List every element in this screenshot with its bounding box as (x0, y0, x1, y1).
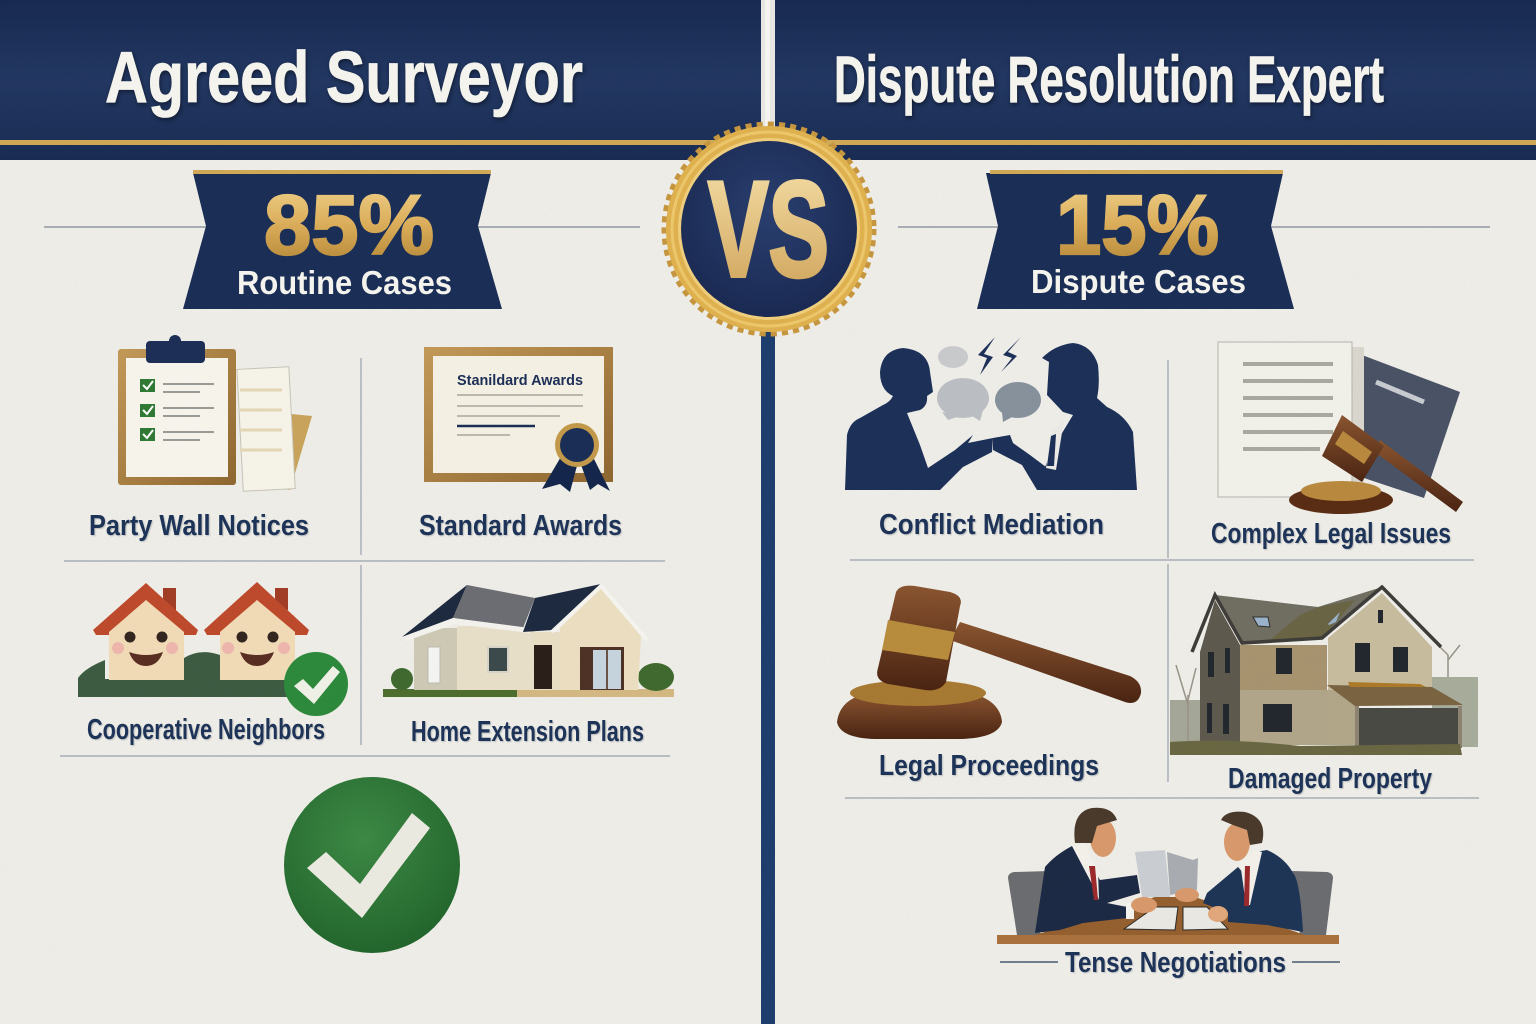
label: Dispute Cases: Dispute Cases (1031, 263, 1246, 300)
icon: damaged property (1170, 587, 1478, 755)
label: Routine Cases: Routine Cases (237, 264, 452, 301)
label: Complex Legal Issues: Complex Legal Issues (1211, 518, 1451, 550)
label: Party Wall Notices: Party Wall Notices (89, 510, 309, 542)
label: Tense Negotiations: Tense Negotiations (1065, 947, 1286, 979)
icon: clipboard with documents (118, 335, 312, 491)
stat: 85%: 85% (264, 178, 434, 272)
title: Agreed Surveyor: Agreed Surveyor (105, 38, 583, 118)
icon: certificate: Stanildard Awards (457, 372, 583, 389)
icon: large gavel (837, 586, 1141, 739)
label: Damaged Property: Damaged Property (1228, 763, 1432, 795)
panel: right stat ribbon (898, 170, 1490, 309)
badge: VS medal: VS (708, 153, 829, 305)
icon: large green check (284, 777, 460, 953)
icon: conflict mediation silhouettes (845, 337, 1137, 490)
icon: complex legal documents with gavel (1218, 342, 1463, 514)
grid lines: right (845, 360, 1479, 798)
icon: tense negotiations (997, 808, 1339, 944)
label: Legal Proceedings: Legal Proceedings (879, 750, 1099, 782)
label: Conflict Mediation: Conflict Mediation (879, 509, 1104, 541)
icon: home extension (383, 584, 674, 697)
center divider line (761, 330, 775, 1024)
label: Home Extension Plans: Home Extension Plans (411, 716, 644, 748)
panel: left stat ribbon (44, 170, 640, 309)
stat: 15%: 15% (1056, 178, 1219, 272)
label: Standard Awards: Standard Awards (419, 510, 622, 542)
grid lines: left (60, 358, 670, 756)
icon: cooperative neighbor houses (78, 582, 348, 716)
panel: header banner (0, 0, 1536, 160)
badge: VS medal (666, 126, 872, 332)
label: Cooperative Neighbors: Cooperative Neighbors (87, 714, 325, 746)
icon: certificate (424, 347, 613, 492)
